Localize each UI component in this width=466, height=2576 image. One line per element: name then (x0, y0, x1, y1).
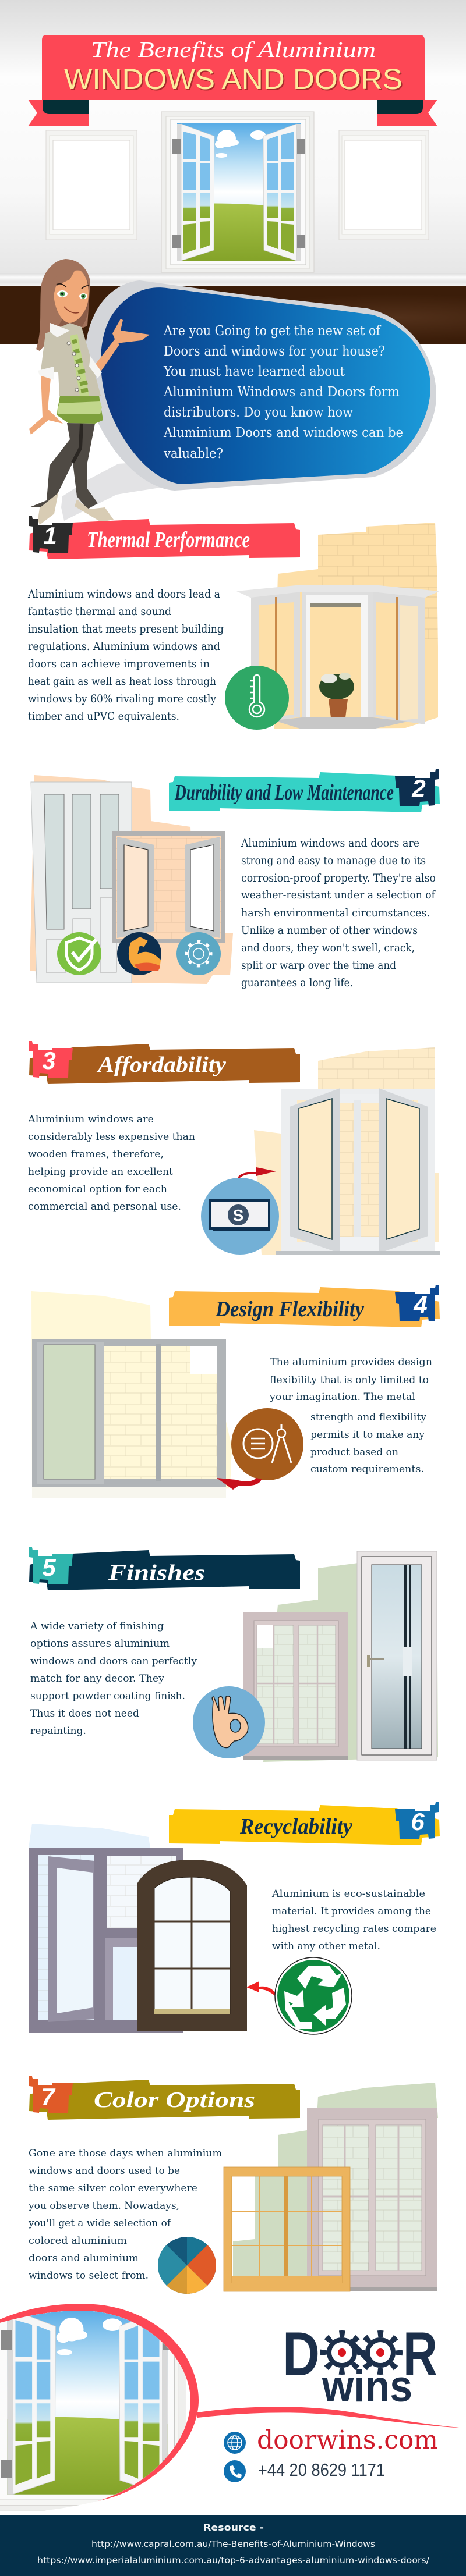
peach wall (30, 775, 233, 984)
icon: gear (176, 932, 221, 975)
logo: Door Wins (283, 2319, 437, 2411)
section 6: recyclability (29, 1802, 440, 2034)
body text 2: guarantees a long life. (241, 976, 353, 989)
logo: Door Wins: R (403, 2319, 437, 2389)
arrow: recycle to window (246, 1981, 275, 1996)
heading ribbon 3: 3 (42, 1047, 56, 1074)
icon: globe (224, 2432, 246, 2454)
intro text: Aluminium Doors and windows can be (163, 425, 403, 440)
body text 3: economical option for each (28, 1184, 167, 1195)
icon: phone (224, 2460, 246, 2482)
body text 3: considerably less expensive than (28, 1131, 195, 1143)
footer: resources: http://www.capral.com.au/The-Benefits-of-Aluminium-Windows (91, 2539, 375, 2549)
main title: WINDOWS AND DOORS (64, 63, 403, 95)
cream wall (254, 1047, 439, 1255)
body text 7: you'll get a wide selection of (28, 2218, 172, 2229)
body text 7: you observe them. Nowadays, (28, 2200, 179, 2212)
arrow: to window (217, 1478, 262, 1490)
body text 5: Thus it does not need (30, 1708, 139, 1719)
bay window (236, 585, 439, 729)
intro text: Are you Going to get the new set of (163, 324, 381, 339)
title banner (28, 35, 437, 126)
section 5: finishes (29, 1547, 438, 1762)
icon: colour pie (158, 2237, 216, 2294)
section 3: affordability (27, 1041, 440, 1255)
glass door (357, 1551, 437, 1760)
body text 4: strength and flexibility (310, 1412, 426, 1423)
icon: banknote: S (233, 1206, 243, 1224)
icon: flexed arm (117, 932, 161, 975)
body text 3 (27, 1114, 195, 1213)
heading ribbon 1 (29, 516, 300, 559)
heading ribbon 4: Design Flexibility (215, 1297, 364, 1321)
body text 2: split or warp over the time and (241, 959, 396, 972)
heading ribbon 2: 2 (411, 774, 426, 802)
body text 7: Gone are those days when aluminium (29, 2148, 222, 2159)
body text 5: options assures aluminium (30, 1638, 170, 1650)
arrow: to window (238, 1167, 276, 1178)
intro text: distributors. Do you know how (164, 405, 353, 420)
body text 1: doors can achieve improvements in (28, 658, 210, 670)
heading ribbon 7: 7 (41, 2083, 55, 2110)
body text 5: A wide variety of finishing (30, 1621, 164, 1632)
intro text (163, 324, 403, 461)
body text 1: heat gain as well as heat loss through (28, 675, 216, 688)
body text 7: doors and aluminium (29, 2252, 139, 2264)
body text 6: Aluminium is eco-sustainable (271, 1888, 425, 1900)
section 4: design flexibility (31, 1285, 440, 1498)
body text 4: custom requirements. (310, 1463, 424, 1475)
heading ribbon 3 (29, 1041, 300, 1084)
body text 4: your imagination. The metal (269, 1391, 415, 1403)
body text 5: windows and doors can perfectly (30, 1655, 197, 1667)
white door (31, 782, 132, 983)
body text 1: fantastic thermal and sound (28, 605, 171, 618)
body text 1 (27, 588, 224, 723)
body text 2: harsh environmental circumstances. (241, 907, 430, 919)
pale yellow wall (31, 1291, 232, 1498)
icon: compass and sliders (231, 1408, 303, 1480)
icon: shield check (57, 932, 101, 975)
body text 7: windows and doors used to be (29, 2165, 180, 2177)
panel: left wall frame (46, 130, 137, 240)
icon: recycling symbol (275, 1957, 352, 2034)
body text 1: Aluminium windows and doors lead a (27, 588, 220, 601)
body text 4 (269, 1356, 432, 1475)
double casement window (276, 1088, 440, 1255)
icon: thermometer (225, 666, 289, 730)
body text 5: match for any decor. They (30, 1673, 164, 1685)
open window with garden view (161, 112, 314, 272)
subtitle: The Benefits of Aluminium (91, 38, 376, 62)
heading ribbon 6: Recyclability (239, 1814, 352, 1839)
section 1: thermal performance (27, 516, 439, 730)
section 7: color options (28, 2076, 438, 2294)
open casement window (112, 831, 225, 943)
intro text: Doors and windows for your house? (164, 344, 385, 359)
heading ribbon 1: Thermal Performance (87, 528, 250, 552)
mauve window (307, 2108, 437, 2291)
brick wall background (274, 523, 438, 729)
heading ribbon 4 (169, 1285, 440, 1327)
logo: Door Wins: D (283, 2319, 320, 2389)
footer: resources: Resource - (203, 2522, 264, 2533)
arched brown window (137, 1860, 247, 2031)
main title: WINDOWS AND DOORS (65, 64, 404, 97)
body text 6: with any other metal. (272, 1941, 380, 1952)
body text 4: product based on (310, 1447, 398, 1458)
body text 2 (241, 837, 436, 989)
heading ribbon 5: Finishes (108, 1561, 205, 1585)
intro text: valuable? (163, 446, 223, 461)
body text 1: timber and uPVC equivalents. (28, 710, 179, 723)
heading ribbon 3: Affordability (97, 1053, 226, 1077)
body text 4: The aluminium provides design (270, 1356, 432, 1368)
sliding window (32, 1339, 226, 1498)
body text 7: the same silver color everywhere (29, 2183, 197, 2194)
body text 7 (28, 2148, 222, 2282)
body text 2: strong and easy to manage due to its (241, 854, 426, 867)
body text 6: highest recycling rates compare (272, 1923, 436, 1935)
body text 3: wooden frames, therefore, (28, 1149, 164, 1160)
body text 2: corrosion-proof property. They're also (241, 872, 436, 884)
closing oval window with red rim (0, 2293, 466, 2520)
body text 7: windows to select from. (29, 2270, 149, 2282)
flower pot (319, 673, 354, 717)
icon: banknote (201, 1178, 279, 1255)
heading ribbon 4: 4 (413, 1291, 428, 1319)
heading ribbon 2 (169, 769, 440, 812)
heading ribbon 7 (29, 2076, 300, 2120)
body text 1: regulations. Aluminium windows and (28, 640, 220, 653)
character: woman presenting (29, 259, 150, 525)
body text 1: insulation that meets present building (28, 623, 224, 635)
body text 3: commercial and personal use. (28, 1201, 181, 1213)
heading ribbon 1: 1 (43, 522, 57, 549)
body text 5: support powder coating finish. (30, 1690, 185, 1702)
green wall (263, 1563, 438, 1762)
footer: resources: https://www.imperialaluminium.com.au/top-6-advantages-aluminium-windows-doors/ (37, 2555, 430, 2566)
body text 3: Aluminium windows are (27, 1114, 154, 1125)
body text 3: helping provide an excellent (28, 1166, 173, 1178)
heading ribbon 6: 6 (411, 1808, 425, 1835)
heading ribbon 5: 5 (42, 1554, 56, 1581)
pale blue wall (29, 1824, 214, 2031)
body text 5 (30, 1621, 197, 1737)
panel: right wall frame (339, 130, 429, 240)
body text 2: and doors, they won't swell, crack, (241, 941, 415, 954)
icon: ok hand (193, 1686, 265, 1758)
body text 1: windows by 60% rivaling more costly (28, 692, 216, 705)
body text 5: repainting. (30, 1725, 86, 1737)
heading ribbon 7: Color Options (94, 2088, 255, 2112)
double window (243, 1612, 348, 1760)
body text 2: Aluminium windows and doors are (241, 837, 419, 850)
heading ribbon 6 (169, 1802, 440, 1845)
speech bubble (61, 280, 436, 521)
phone number: +44 20 8629 1171 (258, 2460, 385, 2480)
header wall scene (0, 0, 466, 344)
intro text: You must have learned about (163, 364, 345, 379)
body text 6: material. It provides among the (272, 1906, 431, 1917)
heading ribbon 5 (29, 1547, 300, 1590)
wooden window (224, 2167, 350, 2291)
intro text: Aluminium Windows and Doors form (163, 385, 400, 400)
grey casement window (29, 1848, 183, 2033)
body text 4: permits it to make any (310, 1429, 425, 1441)
footer: resources (0, 2515, 466, 2576)
body text 4: flexibility that is only limited to (270, 1374, 429, 1386)
logo: Door Wins: wins (322, 2362, 412, 2411)
body text 7: colored aluminium (29, 2235, 127, 2247)
website: doorwins.com (257, 2425, 438, 2455)
body text 2: weather-resistant under a selection of (241, 889, 436, 901)
section 2: durability and low maintenance (30, 769, 440, 989)
body text 2: Unlike a number of other windows (241, 924, 418, 937)
green wall (233, 2083, 438, 2287)
body text 6 (271, 1888, 436, 1952)
